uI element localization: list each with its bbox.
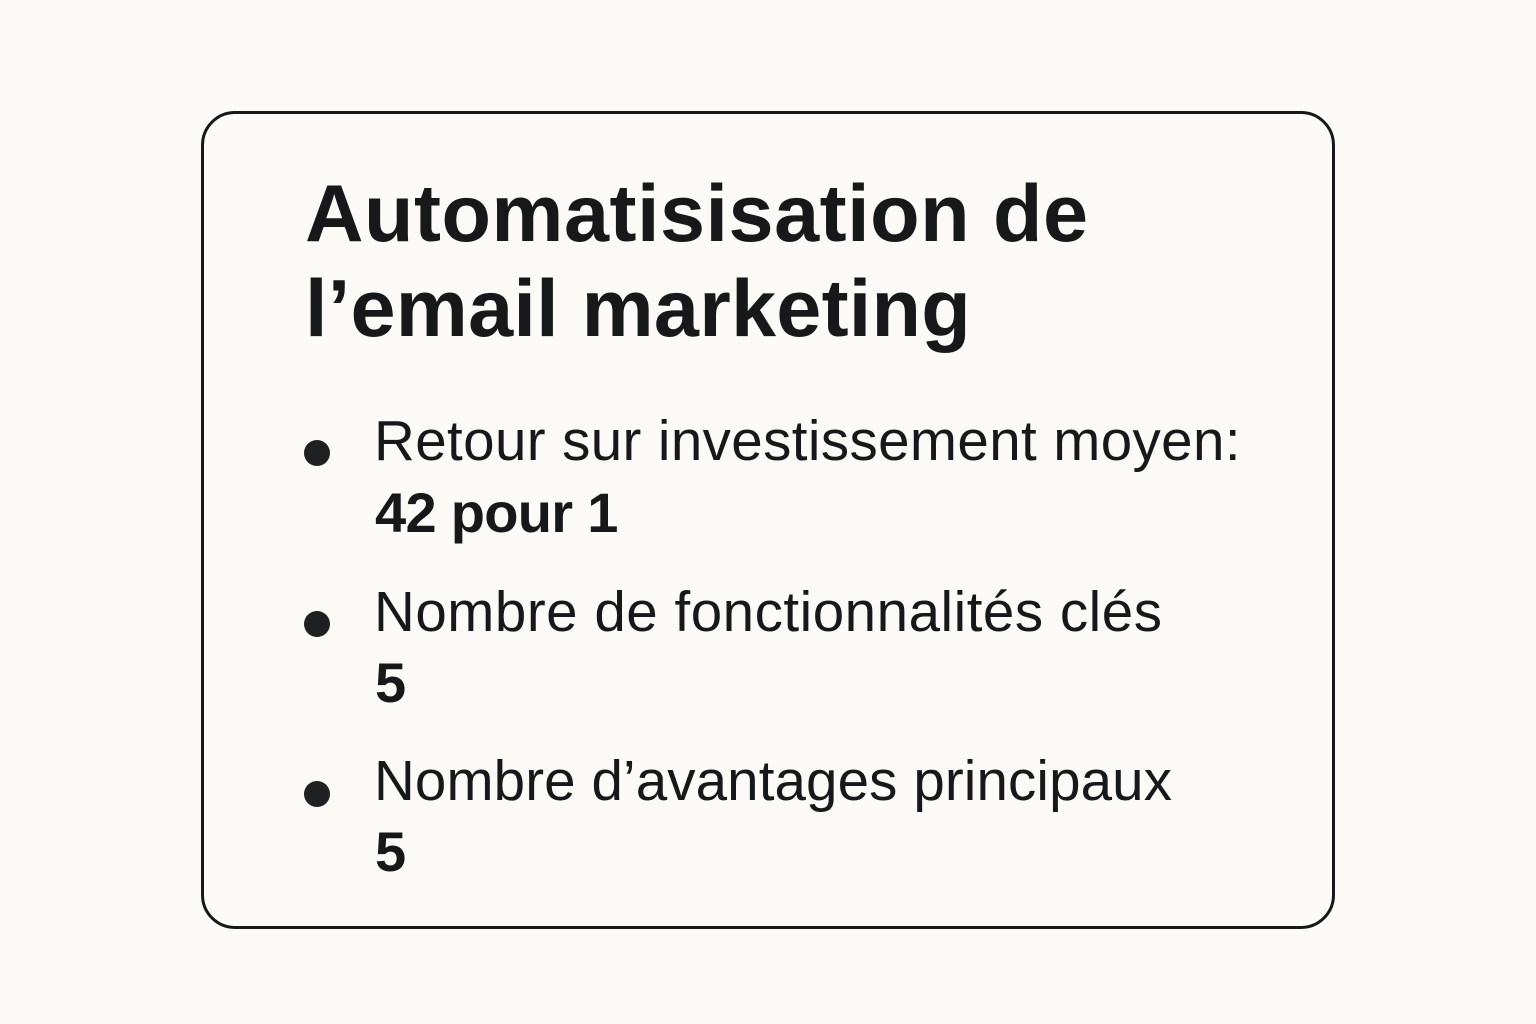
text block: ROI: Retour sur investissement moyen:: [374, 409, 1241, 472]
bullet icon 3: [304, 781, 330, 807]
text block: key features: 5: [375, 651, 406, 714]
text block: ROI: 42 pour 1: [375, 481, 618, 544]
bullet icon 1: [304, 440, 330, 466]
bullet icon 2: [304, 611, 330, 637]
text block: ROI: [374, 409, 1241, 544]
text block: main benefits: Nombre d’avantages principaux: [374, 749, 1172, 812]
text block: key features: Nombre de fonctionnalités clés: [374, 580, 1162, 643]
text block: key features: [374, 580, 1162, 714]
panel: card: [201, 111, 1335, 929]
text block: main benefits: [374, 749, 1172, 883]
title: Automatisisation de: [305, 169, 1089, 259]
text block: main benefits: 5: [375, 820, 406, 883]
title: l’email marketing: [305, 264, 971, 354]
title: [305, 169, 1089, 354]
